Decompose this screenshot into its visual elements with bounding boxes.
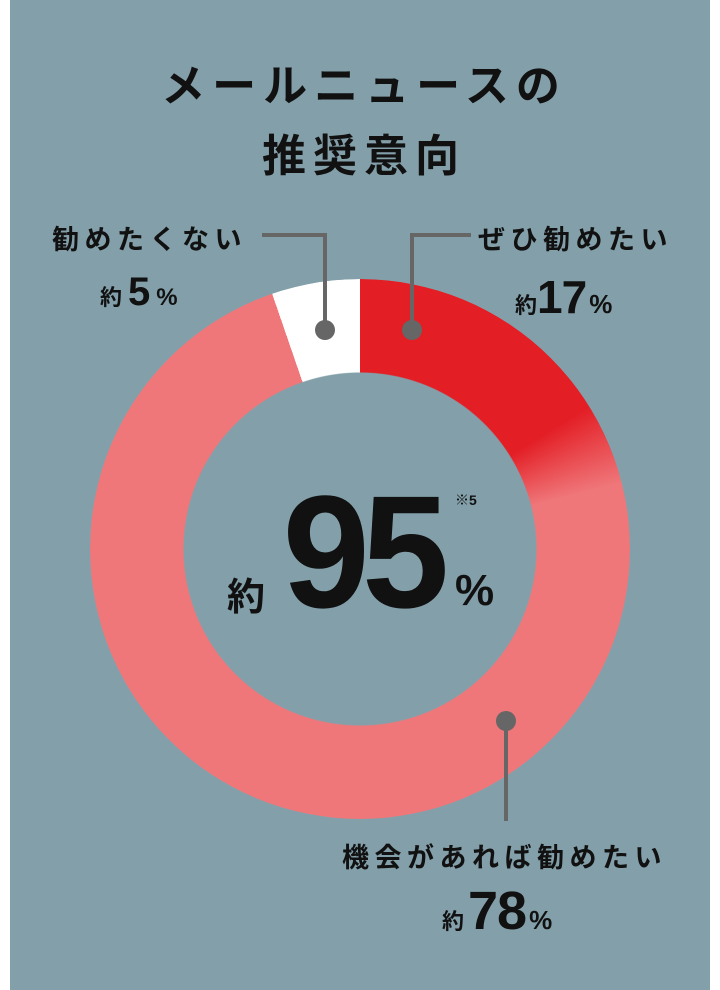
center figure: 約 bbox=[227, 577, 265, 619]
center figure: 95 bbox=[283, 462, 441, 641]
leader line: left bbox=[262, 233, 335, 340]
center figure bbox=[227, 462, 494, 641]
label: 勧めたくない bbox=[52, 225, 247, 314]
leader line: bottom bbox=[496, 711, 516, 821]
center figure: ※5 bbox=[455, 492, 477, 508]
title: 推奨意向 bbox=[262, 132, 466, 181]
center figure: % bbox=[455, 566, 494, 615]
leader line: right bbox=[402, 233, 471, 340]
title bbox=[161, 62, 567, 181]
label: ぜひ勧めたい: ぜひ勧めたい bbox=[478, 225, 673, 255]
label: ぜひ勧めたい bbox=[478, 225, 673, 323]
label: 勧めたくない: 約5% bbox=[100, 270, 178, 314]
title: メールニュースの bbox=[161, 62, 567, 111]
label: 機会があれば勧めたい: 機会があれば勧めたい bbox=[342, 843, 667, 873]
label: 機会があれば勧めたい: 約78% bbox=[442, 881, 552, 941]
label: 勧めたくない: 勧めたくない bbox=[52, 225, 247, 255]
donut chart bbox=[90, 279, 630, 819]
label: ぜひ勧めたい: 約17% bbox=[515, 271, 612, 323]
label: 機会があれば勧めたい bbox=[342, 843, 667, 941]
